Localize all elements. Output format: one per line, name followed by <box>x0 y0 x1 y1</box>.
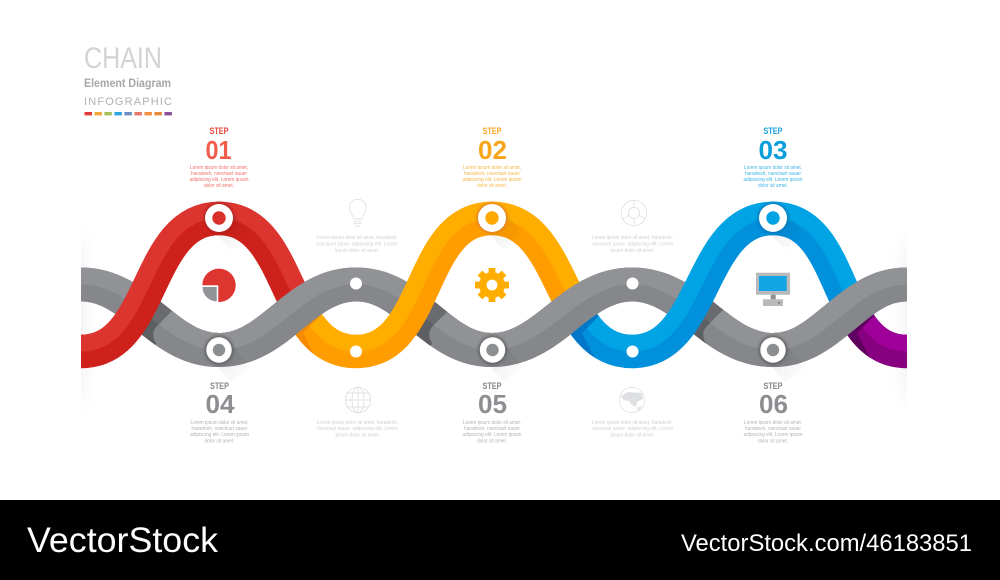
node: step 01 <box>203 202 250 250</box>
red strand <box>81 202 305 368</box>
subtitle: element diagram: Element Diagram <box>84 76 171 90</box>
step label: STEP <box>764 381 782 391</box>
description: dolor sit amet. <box>758 438 788 444</box>
step number: 05 <box>478 389 507 419</box>
description: Lorem ipsum dolor sit amet, <box>190 165 248 171</box>
footer band <box>0 500 1000 580</box>
step label: STEP <box>482 381 502 391</box>
description: dolor sit amet. <box>204 438 235 444</box>
description: haradesh, nsectiuet sauer <box>745 171 801 177</box>
note: lower right <box>592 420 673 438</box>
note: upper right: nsectiuet sauer. adipiscing elit. Lorem <box>592 242 673 248</box>
description: Lorem ipsum dolor sit amet, <box>190 420 249 426</box>
note: lower left: ipsum dolor sit amet. <box>336 432 380 438</box>
description <box>744 420 803 444</box>
description: haradesh, nsectiuet sauer <box>464 426 520 432</box>
step number: 06 <box>759 389 788 419</box>
step number: 04 <box>206 389 235 419</box>
description: Lorem ipsum dolor sit amet, <box>744 420 802 426</box>
step 01 label <box>190 126 249 189</box>
step 06 label <box>744 381 803 444</box>
description: adipiscing elit. Lorem ipsum <box>744 432 803 438</box>
icon: circular chart <box>621 200 647 226</box>
description: adipiscing elit. Lorem ipsum <box>190 432 249 438</box>
node: step 03 <box>757 202 804 250</box>
step number: 02 <box>478 135 507 165</box>
description: adipiscing elit. Lorem ipsum <box>744 177 803 183</box>
note: lower right: Lorem ipsum dolor sit amet, haradesh, <box>592 420 673 426</box>
gray strand: lower layer <box>81 268 907 367</box>
node: step 06 <box>758 335 804 382</box>
description <box>462 165 522 189</box>
title: chain: CHAIN <box>84 42 162 75</box>
step 02 label <box>462 126 522 189</box>
description: haradesh, nsectiuet sauer <box>745 426 801 432</box>
orange strand <box>296 202 580 368</box>
note: upper left: Lorem ipsum dolor sit amet, haradesh, <box>316 235 398 241</box>
description: Lorem ipsum dolor sit amet, <box>744 165 802 171</box>
step number: 03 <box>758 135 788 165</box>
description: dolor sit amet. <box>477 183 507 189</box>
footer logo: VectorStock <box>27 521 219 560</box>
chain ribbons <box>81 218 907 367</box>
node: step 05 <box>478 335 523 382</box>
step label: STEP <box>764 126 782 136</box>
edge fades <box>81 262 907 378</box>
description <box>744 165 803 189</box>
description <box>190 165 249 189</box>
step label: STEP <box>210 126 228 136</box>
description <box>462 420 522 444</box>
description: Lorem ipsum dolor sit amet, <box>463 420 521 426</box>
node: step 02 <box>476 202 523 250</box>
note: lower left: Lorem ipsum dolor sit amet, haradesh, <box>317 420 398 426</box>
note: lower right: ipsum dolor sit amet. <box>610 432 655 438</box>
description: dolor sit amet. <box>477 438 507 444</box>
icon: pie chart <box>202 269 236 302</box>
description: adipiscing elit. Lorem ipsum <box>190 177 249 183</box>
description: haradesh, nsectiuet sauer <box>191 171 247 177</box>
description: dolor sit amet. <box>758 183 788 189</box>
blue strand <box>570 202 857 368</box>
description: haradesh, nsectiuet sauer <box>464 171 520 177</box>
description: adipiscing elit. Lorem ipsum <box>462 432 522 438</box>
note: lower left: nsectiuet sauer. adipiscing elit. Lorem <box>317 426 398 432</box>
note: upper right: ipsum dolor sit amet. <box>610 248 655 254</box>
gray strand: upper layer <box>81 268 907 367</box>
node: step 04 <box>204 335 250 382</box>
note: upper right <box>592 235 673 254</box>
note: upper left <box>316 235 398 254</box>
description: haradesh, nsectiuet sauer <box>192 426 248 432</box>
note: upper left: ipsum dolor sit amet. <box>335 248 379 254</box>
icon: world map globe <box>619 387 645 413</box>
step label: STEP <box>482 126 502 136</box>
footer url: VectorStock.com/46183851 <box>681 530 972 557</box>
icon: gear <box>475 268 509 302</box>
description <box>190 420 249 444</box>
note: upper right: Lorem ipsum dolor sit amet, haradesh, <box>592 235 673 241</box>
note: lower right: nsectiuet sauer. adipiscing elit. Lorem <box>592 426 673 432</box>
small white dots <box>350 278 638 358</box>
note: upper left: nsectiuet sauer. adipiscing elit. Lorem <box>316 242 398 248</box>
description: adipiscing elit. Lorem ipsum <box>462 177 522 183</box>
step number: 01 <box>206 135 232 165</box>
description: dolor sit amet. <box>204 183 234 189</box>
icon: monitor <box>756 273 790 306</box>
step 03 label <box>744 126 803 189</box>
note: lower left <box>317 420 398 438</box>
step 05 label <box>462 381 522 444</box>
icon: light bulb <box>349 199 366 226</box>
description: Lorem ipsum dolor sit amet, <box>463 165 521 171</box>
purple strand <box>848 314 907 368</box>
step 04 label <box>190 381 249 444</box>
title block <box>84 42 172 115</box>
subtitle: infographic: INFOGRAPHIC <box>84 96 172 108</box>
step label: STEP <box>210 381 229 391</box>
icon: wire globe <box>345 387 371 413</box>
colour dashes <box>84 112 172 115</box>
